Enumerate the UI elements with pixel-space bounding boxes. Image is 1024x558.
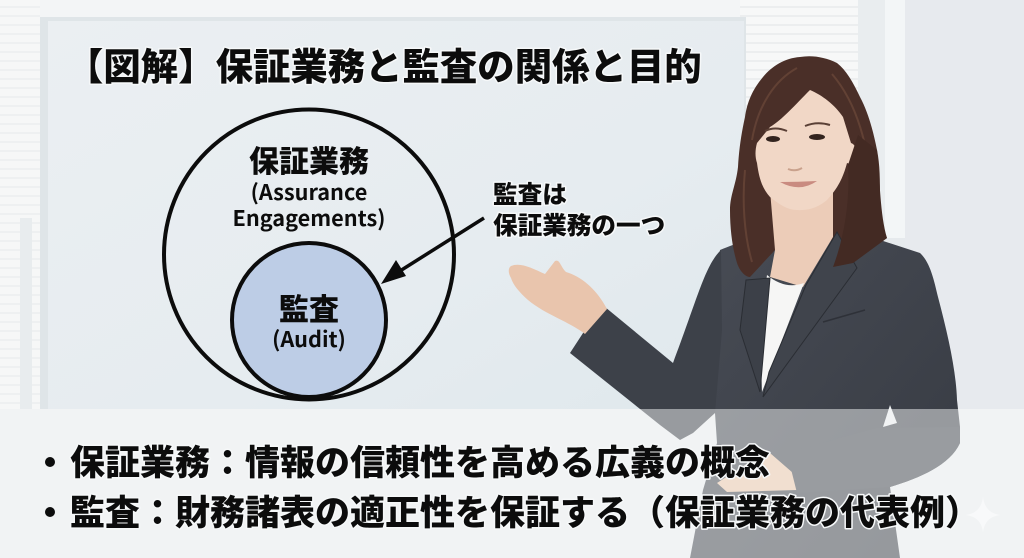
label: Audit: (Audit): [272, 323, 346, 354]
presenter illustration: [509, 56, 960, 558]
bullet points: [45, 435, 980, 536]
label: Assurance Engagements: Engagements): [233, 202, 385, 233]
right front hair: [833, 135, 887, 267]
hair highlights: [744, 68, 868, 262]
bullet 1: 保証業務：情報の信頼性を高める広義の概念: [70, 435, 770, 486]
hair: [730, 56, 887, 277]
label: 保証業務: 保証業務: [249, 137, 369, 181]
blouse: [760, 275, 804, 392]
label: 監査: 監査: [279, 285, 339, 329]
hand: [509, 261, 607, 334]
callout: 監査は保証業務の一つ: 監査は: [493, 175, 567, 211]
clasped hand: [717, 453, 797, 492]
facial features: [765, 123, 830, 187]
whiteboard: [40, 17, 746, 417]
face: [756, 90, 856, 210]
sleeve: [570, 250, 722, 440]
bottom translucent text band: [0, 409, 1024, 558]
arrow from callout to inner circle: [381, 218, 484, 284]
jacket body: [690, 236, 960, 558]
lapels: [740, 278, 770, 392]
light floor of text band behind presenter: [0, 409, 1024, 558]
title: 【図解】保証業務と監査の関係と目的: [66, 37, 702, 91]
diagram: inner circle 監査: [232, 243, 386, 397]
neck: [770, 190, 833, 287]
forearm: [787, 427, 960, 493]
bullet 2: 監査：財務諸表の適正性を保証する（保証業務の代表例）: [70, 485, 980, 536]
gap between arm and torso: [883, 405, 897, 427]
jacket pocket: [823, 310, 865, 322]
sparkle icon: [966, 497, 1000, 532]
label: Assurance Engagements: (Assurance: [251, 176, 367, 207]
callout: 監査は保証業務の一つ: 保証業務の一つ: [493, 206, 665, 242]
diagram: outer circle 保証業務: [164, 110, 454, 400]
